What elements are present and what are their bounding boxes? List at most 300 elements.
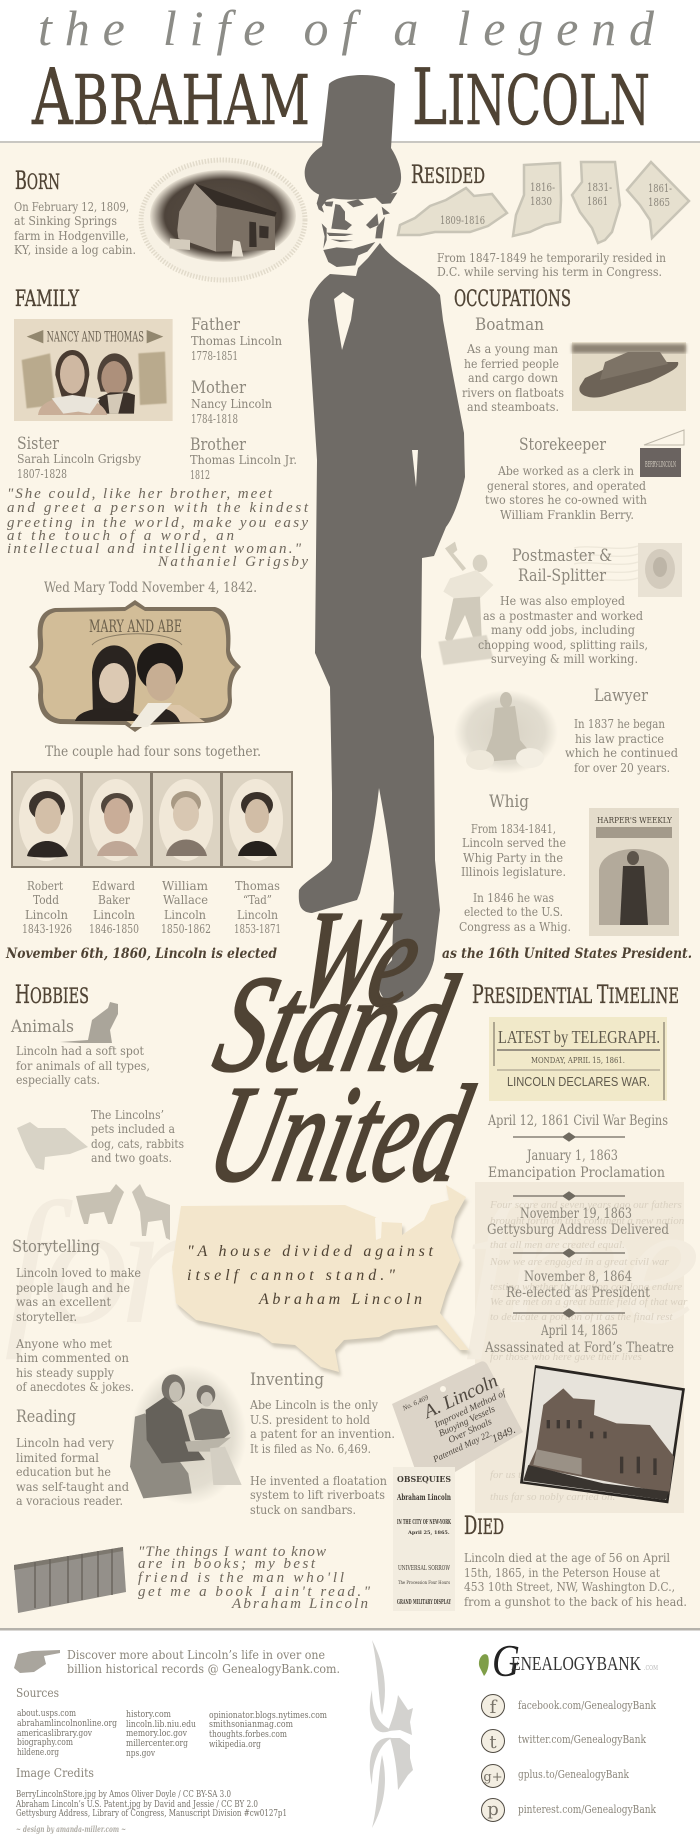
manuscript handwriting: Gettysburg Address: brought forth on this continent a new nation: [490, 1215, 685, 1227]
social: Twitter: twitter.com/GenealogyBank: [518, 1733, 646, 1746]
occupation: Boatman: he ferried people: [464, 356, 559, 371]
column 1: hildene.org: [17, 1747, 59, 1758]
map: Washington DC: [627, 162, 689, 238]
heading: Sources: Sources: [16, 1685, 59, 1700]
image: Obsequies broadside: [393, 1467, 455, 1611]
footer: image credits: ~ design by amanda-miller.com ~: [16, 1825, 126, 1835]
manuscript handwriting: Gettysburg Address: testing whether that nation can long endure: [490, 1281, 682, 1293]
left hair: [317, 194, 334, 213]
cabin left wall: [177, 183, 217, 252]
event: Emancipation Proclamation: [488, 1148, 665, 1181]
slogan: We Stand United: United: [195, 1058, 484, 1211]
manuscript handwriting: Gettysburg Address: for us to be here dedicated: [490, 1469, 608, 1481]
event: Emancipation Proclamation: January 1, 1863: [525, 1148, 618, 1164]
portrait: Edward: [82, 772, 151, 867]
lower arches: [533, 1449, 582, 1475]
brother: Thomas Lincoln Jr.: [190, 452, 297, 467]
slogan: We Stand United: Stand: [202, 948, 469, 1101]
manuscript handwriting: Gettysburg Address: that all men are created equal.: [490, 1239, 625, 1251]
logo: GenealogyBank: ENEALOGYBANK: [511, 1653, 641, 1675]
event: Civil War begins: April 12, 1861 Civil War Begins: [487, 1113, 668, 1129]
occupation: Whig: From 1834-1841,: [471, 821, 556, 836]
caption: William: Wallace: [163, 892, 208, 907]
footer ornament: [370, 1640, 413, 1828]
footer: call to action: [14, 1647, 340, 1676]
section: occupations: [438, 287, 686, 936]
map: Illinois: [572, 162, 620, 243]
logo: GenealogyBank: G: [492, 1635, 520, 1686]
hobby: Inventing: He invented a floatation: [250, 1473, 387, 1488]
footer: call to action: billion historical records @ GenealogyBank.com.: [67, 1661, 340, 1676]
portrait: Thomas: [222, 772, 292, 867]
note: four sons: The couple had four sons together.: [45, 744, 261, 760]
caption: William: [161, 878, 211, 936]
hobby: Animals: for animals of all types,: [16, 1058, 150, 1073]
hobby: Animals: [10, 1017, 150, 1087]
hobby: Storytelling: storyteller.: [16, 1309, 77, 1324]
occupation: Postmaster and Rail-Splitter: surveying & mill working.: [491, 651, 638, 666]
father: 1778-1851: [191, 348, 238, 363]
hobby: Reading: Lincoln had very: [16, 1435, 115, 1450]
column 2: millercenter.org: [126, 1738, 188, 1749]
quote: [187, 1243, 434, 1308]
Thomas: [97, 353, 133, 392]
quote: books: Abraham Lincoln: [231, 1596, 368, 1612]
watermark: forever free: forever free: [4, 1166, 700, 1360]
brother: [190, 435, 297, 482]
caption: William: Lincoln: [164, 907, 206, 922]
brother: 1812: [190, 467, 210, 482]
quote: Nathaniel Grigsby: Nathaniel Grigsby: [157, 554, 308, 570]
event: Re-elected: November 8, 1864: [524, 1269, 632, 1285]
caption: Robert: Todd: [33, 892, 59, 907]
occupation: Boatman: rivers on flatboats: [462, 385, 564, 400]
map quote: house divided: [172, 1185, 471, 1376]
map: Illinois: 1861: [587, 195, 608, 208]
right eye: [347, 199, 364, 207]
quote: books: friend is the man who'll: [138, 1570, 344, 1586]
image: postage stamp: [574, 543, 682, 597]
figure and foreground: [232, 240, 243, 257]
lake notch: [375, 1218, 382, 1240]
portrait: Robert: [12, 772, 81, 867]
column 3: thoughts.forbes.com: [209, 1729, 287, 1740]
image: rail-splitter: [438, 542, 493, 665]
icon: cat: [60, 1002, 118, 1043]
footer: sources: [16, 1685, 327, 1759]
occupation: Whig: Congress as a Whig.: [459, 919, 571, 934]
Lincoln silhouette: [299, 75, 465, 1003]
footer: image credits: Abraham Lincoln’s U.S. Patent.jpg by David and Jessie / CC BY 2.0: [15, 1799, 258, 1810]
caption: Edward: [89, 878, 139, 936]
newspaper clipping: MONDAY, APRIL 15, 1861.: [531, 1056, 625, 1065]
legs: [210, 1447, 242, 1485]
newspaper clipping: LINCOLN DECLARES WAR.: [507, 1074, 650, 1089]
resided note: [437, 250, 666, 279]
social: Pinterest: [482, 1798, 656, 1822]
quote: Nathaniel Grigsby: greeting in the world, make you easy: [7, 515, 308, 531]
map: Indiana: 1830: [530, 195, 552, 208]
section: born: [14, 160, 305, 280]
quote: books: get me a book I ain't read.": [138, 1584, 371, 1600]
image: Obsequies broadside: The Procession Four Hours: [398, 1580, 450, 1586]
footer: call to action: Discover more about Lincoln’s life in over one: [67, 1647, 325, 1662]
coat and legs: [299, 243, 465, 1003]
manuscript handwriting: Gettysburg Address: thus far so nobly carried on.: [490, 1491, 615, 1503]
newspaper clipping: LATEST by TELEGRAPH.: [498, 1027, 660, 1047]
hobby: Animals: Animals: [10, 1017, 74, 1037]
mother: [191, 378, 272, 426]
column 1: [17, 1708, 117, 1758]
hobby: Storytelling: Anyone who met: [15, 1336, 112, 1351]
map: Indiana: 1816-: [530, 181, 555, 194]
quote: "A house divided against: [187, 1243, 434, 1260]
Nancy: [55, 350, 89, 397]
occupation: Boatman: Boatman: [475, 315, 544, 335]
column 2: lincoln.lib.niu.edu: [126, 1719, 196, 1730]
heading: Family: FAMILY: [15, 287, 79, 312]
icon: leaf: [479, 1654, 489, 1676]
caption: Thomas: 1853-1871: [234, 921, 281, 936]
column 1: americaslibrary.gov: [17, 1728, 92, 1739]
logo: GenealogyBank: .COM: [644, 1665, 658, 1672]
image: Harper's Weekly: HARPER'S WEEKLY: [597, 816, 673, 825]
image: patent tag: Over Shoals: [447, 1417, 494, 1446]
face details: [317, 193, 397, 267]
occupation: Lawyer: for over 20 years.: [574, 760, 670, 775]
caption: Robert: Lincoln: [25, 907, 68, 922]
wedding date: Wed Mary Todd November 4, 1842.: [44, 580, 257, 596]
column 2: memory.loc.gov: [126, 1728, 188, 1739]
event: Re-elected: Re-elected as President: [506, 1285, 651, 1301]
occupation: Postmaster and Rail-Splitter: [478, 546, 648, 666]
occupation: Postmaster and Rail-Splitter: many odd jobs, including: [491, 622, 635, 637]
hobby: Inventing: stuck on sandbars.: [250, 1502, 356, 1517]
occupation: Boatman: [462, 315, 564, 414]
Abe: [137, 643, 183, 691]
image: Obsequies broadside: IN THE CITY OF NEW-YORK: [397, 1519, 451, 1526]
occupation: Whig: Lincoln served the: [462, 835, 566, 850]
event: Re-elected: [506, 1269, 651, 1301]
social: Pinterest: p: [487, 1799, 499, 1820]
died text: [464, 1550, 687, 1609]
hobby: Storytelling: was an excellent: [16, 1294, 111, 1309]
pets text: [91, 1107, 184, 1165]
image: Harper's Weekly: [589, 808, 679, 936]
quote: books: are in books; my best: [138, 1556, 316, 1572]
quote: Abraham Lincoln: [258, 1291, 422, 1308]
occupation: Whig: Whig: [489, 792, 529, 812]
column 3: smithsonianmag.com: [209, 1719, 293, 1730]
hobby: Storytelling: Storytelling: [12, 1237, 100, 1257]
column 3: [209, 1710, 327, 1750]
map of United States: [172, 1185, 469, 1372]
occupation: Whig: elected to the U.S.: [464, 904, 563, 919]
map: Illinois: 1831-: [587, 181, 612, 194]
occupation: Lawyer: Lawyer: [594, 686, 649, 706]
map: Kentucky: 1809-1816: [440, 214, 485, 227]
event: Gettysburg Address: November 19, 1863: [520, 1206, 632, 1222]
sister: 1807-1828: [17, 466, 67, 481]
manuscript handwriting: Gettysburg Address: Now we are engaged in a great civil war: [489, 1256, 670, 1268]
occupation: Postmaster and Rail-Splitter: Postmaster &: [512, 546, 612, 566]
section: hobbies: [10, 980, 395, 1613]
caption: Thomas: [234, 878, 281, 936]
sister: Sister: [17, 434, 60, 454]
book: [185, 1437, 231, 1452]
cabin right wall: [216, 205, 275, 252]
social: Twitter: t: [489, 1732, 497, 1753]
slogan: We Stand United: We: [282, 883, 436, 1036]
footer: image credits: [15, 1765, 287, 1835]
hobby: Storytelling: people laugh and he: [16, 1280, 130, 1295]
mother: 1784-1818: [191, 411, 238, 426]
coat pocket slit: [412, 450, 418, 487]
right hair: [373, 193, 397, 215]
column 2: [126, 1709, 196, 1759]
quote: Nathaniel Grigsby: and greet a person with the kindest: [7, 500, 309, 516]
manuscript handwriting: Gettysburg Address: Four score and seven years ago our fathers: [489, 1199, 682, 1211]
Lincoln: [162, 1374, 185, 1402]
occupation: Storekeeper: [485, 435, 647, 522]
section: family: [7, 287, 309, 936]
event: Gettysburg Address: Gettysburg Address Delivered: [487, 1222, 669, 1238]
hobby: Inventing: system to lift riverboats: [250, 1487, 385, 1502]
manuscript panel: [475, 1182, 684, 1513]
social: Facebook: facebook.com/GenealogyBank: [518, 1699, 656, 1712]
map shadow: [174, 1189, 471, 1376]
chair: [130, 1413, 192, 1498]
quote: books: "The things I want to know: [138, 1544, 326, 1560]
birth text: at Sinking Springs: [14, 213, 117, 228]
caption: Thomas: Thomas: [235, 878, 280, 893]
image: patent tag: 1849.: [490, 1424, 518, 1445]
sister: [17, 434, 142, 481]
map: Indiana: [513, 163, 561, 236]
side hair: [375, 217, 385, 238]
column 2: nps.gov: [126, 1748, 155, 1759]
leaves: [27, 330, 163, 343]
icon: goats: [76, 1184, 170, 1240]
occupation: Lawyer: which he continued: [565, 745, 678, 760]
image: Obsequies broadside: Abraham Lincoln: [396, 1492, 451, 1502]
died text: Lincoln died at the age of 56 on April: [464, 1550, 670, 1565]
hobby: Reading: [16, 1407, 129, 1508]
theatre: [528, 1388, 674, 1493]
left beard strip: [322, 223, 327, 249]
father: Thomas Lincoln: [191, 333, 282, 348]
map: Washington DC: 1865: [648, 196, 670, 209]
image: patent tag: No. 6,469: [400, 1393, 430, 1413]
sister: Sarah Lincoln Grigsby: [17, 451, 142, 466]
image: Ford's Theatre photograph: [520, 1365, 685, 1503]
hobby: Inventing: U.S. president to hold: [250, 1412, 370, 1427]
quote: Nathaniel Grigsby: intellectual and intelligent woman.": [7, 541, 302, 557]
birth text: [14, 199, 136, 257]
hobby: Storytelling: Lincoln loved to make: [16, 1265, 141, 1280]
event: Assassination: Assassinated at Ford’s Theatre: [484, 1340, 674, 1356]
street and foreground: [523, 1465, 669, 1500]
icon: pointing hand: [14, 1650, 60, 1673]
portrait: Mary and Abe: [29, 600, 241, 732]
column 3: opinionator.blogs.nytimes.com: [209, 1710, 327, 1721]
title: Abraham: ABRAHAM: [31, 53, 310, 143]
column 3: wikipedia.org: [209, 1739, 261, 1750]
hobby: Inventing: a patent for an invention.: [250, 1426, 395, 1441]
log cabin vignette: [141, 160, 305, 280]
occupation: Lawyer: [565, 686, 678, 775]
hobby: Inventing: Abe Lincoln is the only: [249, 1397, 379, 1412]
footer: image credits: BerryLincolnStore.jpg by Amos Oliver Doyle / CC BY-SA 3.0: [16, 1789, 231, 1800]
quote: books: [138, 1544, 371, 1612]
caption: Thomas: Lincoln: [237, 907, 278, 922]
occupation: Storekeeper: Storekeeper: [519, 435, 607, 455]
beard: [323, 242, 375, 267]
hobby: Reading: was self-taught and: [16, 1479, 129, 1494]
shirt front: [334, 292, 354, 350]
occupation: Postmaster and Rail-Splitter: as a postmaster and worked: [483, 608, 643, 623]
newspaper clipping: [489, 1017, 667, 1101]
hobby: Inventing: Inventing: [250, 1370, 324, 1390]
manuscript handwriting: Gettysburg Address: We are met on a great battle field of that war: [490, 1296, 688, 1308]
occupation: Whig: [459, 792, 571, 934]
occupation: Lawyer: his law practice: [575, 731, 664, 746]
event: Assassination: [484, 1323, 674, 1356]
section: died: [464, 1511, 687, 1609]
caption: Edward: 1846-1850: [89, 921, 139, 936]
portrait: Nancy and Thomas: NANCY AND THOMAS: [47, 330, 144, 346]
column 1: abrahamlincolnonline.org: [17, 1718, 117, 1729]
divider: [513, 1192, 625, 1200]
logo: GenealogyBank: [479, 1635, 658, 1686]
occupation: Storekeeper: William Franklin Berry.: [500, 507, 634, 522]
hobby: Reading: a voracious reader.: [16, 1493, 123, 1508]
pets text: pets included a: [91, 1121, 175, 1136]
social: Twitter: [482, 1730, 646, 1753]
social: Google Plus: g+: [483, 1770, 503, 1785]
image: flatboat: [572, 342, 686, 411]
hobby: Storytelling: his steady supply: [16, 1365, 115, 1380]
slogan: We Stand United: [195, 883, 484, 1211]
hobby: Reading: education but he: [16, 1464, 111, 1479]
quote: Nathaniel Grigsby: [7, 486, 309, 570]
birth text: farm in Hodgenville,: [14, 228, 129, 243]
image: lady justice: [454, 690, 558, 774]
hobby: Reading: limited formal: [16, 1450, 99, 1465]
map: Washington DC: 1861-: [648, 182, 672, 195]
event: Gettysburg Address: [487, 1206, 669, 1238]
footer: image credits: Image Credits: [16, 1765, 94, 1780]
title: the life of a legend: the life of a legend: [38, 0, 655, 56]
pets text: and two goats.: [91, 1150, 172, 1165]
heading: Occupations: OCCUPATIONS: [454, 287, 571, 312]
caption: Robert: Robert: [27, 878, 63, 893]
map: Kentucky: [398, 188, 507, 235]
manuscript handwriting: Gettysburg Address: [489, 1199, 688, 1503]
occupation: Boatman: As a young man: [466, 341, 558, 356]
column 1: biography.com: [17, 1737, 73, 1748]
birth text: KY, inside a log cabin.: [14, 242, 136, 257]
sky: [523, 1368, 682, 1500]
nose shadow: [331, 204, 352, 230]
caption: Edward: Lincoln: [93, 907, 135, 922]
image: Obsequies broadside: April 25, 1865.: [407, 1530, 450, 1536]
occupation: Postmaster and Rail-Splitter: chopping wood, splitting rails,: [478, 637, 648, 652]
hobby: Storytelling: [12, 1237, 141, 1394]
door and window: [249, 222, 269, 247]
hobby: Storytelling: of anecdotes & jokes.: [16, 1379, 134, 1394]
footer: image credits: Gettysburg Address, Library of Congress, Manuscript Division #cw0127p1: [16, 1808, 287, 1819]
occupation: Postmaster and Rail-Splitter: Rail-Splitter: [518, 566, 607, 586]
heading: Born: BORN: [15, 166, 60, 195]
image: Obsequies broadside: OBSEQUIES: [397, 1474, 451, 1484]
column 1: about.usps.com: [17, 1708, 76, 1719]
section: presidential timeline: [392, 980, 688, 1611]
manuscript handwriting: Gettysburg Address: to dedicate a portion of it as the final rest: [490, 1311, 674, 1323]
social: Facebook: f: [490, 1697, 498, 1718]
hobby: Inventing: It is filed as No. 6,469.: [250, 1441, 371, 1456]
cheek: [366, 213, 379, 229]
social: Google Plus: gplus.to/GenealogyBank: [518, 1768, 629, 1781]
father: Father: [191, 315, 241, 335]
heading: Died: DIED: [464, 1511, 504, 1540]
caption: William: William: [162, 878, 208, 893]
occupation: Boatman: and steamboats.: [467, 399, 559, 414]
mother: Mother: [191, 378, 247, 398]
section: resided: [398, 160, 689, 279]
occupation: Whig: In 1846 he was: [473, 890, 554, 905]
occupation: Storekeeper: general stores, and operated: [487, 478, 646, 493]
hobby: Storytelling: him commented on: [16, 1350, 129, 1365]
portrait: William: [152, 772, 221, 867]
quote: itself cannot stand.": [187, 1267, 395, 1284]
Tad: [197, 1385, 215, 1405]
social: Pinterest: pinterest.com/GenealogyBank: [518, 1803, 656, 1816]
image: patent tag: Patented May 22.: [430, 1428, 493, 1465]
image: Obsequies broadside: UNIVERSAL SORROW: [398, 1565, 451, 1572]
caption: Robert: [22, 878, 72, 936]
occupation: Postmaster and Rail-Splitter: He was also employed: [500, 593, 625, 608]
roof: [195, 183, 277, 217]
mouth: [327, 233, 353, 242]
divider: [513, 1249, 625, 1257]
hobby: Reading: Reading: [16, 1407, 76, 1427]
Mary: [92, 645, 136, 718]
corn plants: [22, 352, 167, 408]
social: Google Plus: [482, 1764, 629, 1788]
occupation: Storekeeper: Abe worked as a clerk in: [497, 463, 634, 478]
windows: [547, 1420, 657, 1475]
election statement left: November 6th, 1860, Lincoln is elected: [5, 946, 278, 962]
occupation: Storekeeper: two stores he co-owned with: [485, 492, 647, 507]
birth text: On February 12, 1809,: [14, 199, 129, 214]
image: patent tag: [392, 1361, 525, 1476]
heading: Hobbies: HOBBIES: [15, 980, 89, 1009]
caption: Edward: Baker: [98, 892, 130, 907]
mother: Nancy Lincoln: [191, 396, 272, 411]
portrait: Nancy and Thomas: [14, 319, 173, 421]
father: [191, 315, 282, 363]
hat: [305, 75, 401, 200]
heading: Resided: RESIDED: [411, 160, 485, 189]
resided note: From 1847-1849 he temporarily resided in: [437, 250, 666, 265]
hobby: Inventing: [249, 1370, 395, 1517]
quote: Nathaniel Grigsby: "She could, like her brother, meet: [7, 486, 273, 502]
image: patent tag: Improved Method of: [432, 1387, 509, 1431]
caption: Edward: Edward: [92, 878, 135, 893]
resided note: D.C. while serving his term in Congress.: [437, 264, 662, 279]
image: Obsequies broadside: GRAND MILITARY DISPLAY: [397, 1599, 451, 1606]
